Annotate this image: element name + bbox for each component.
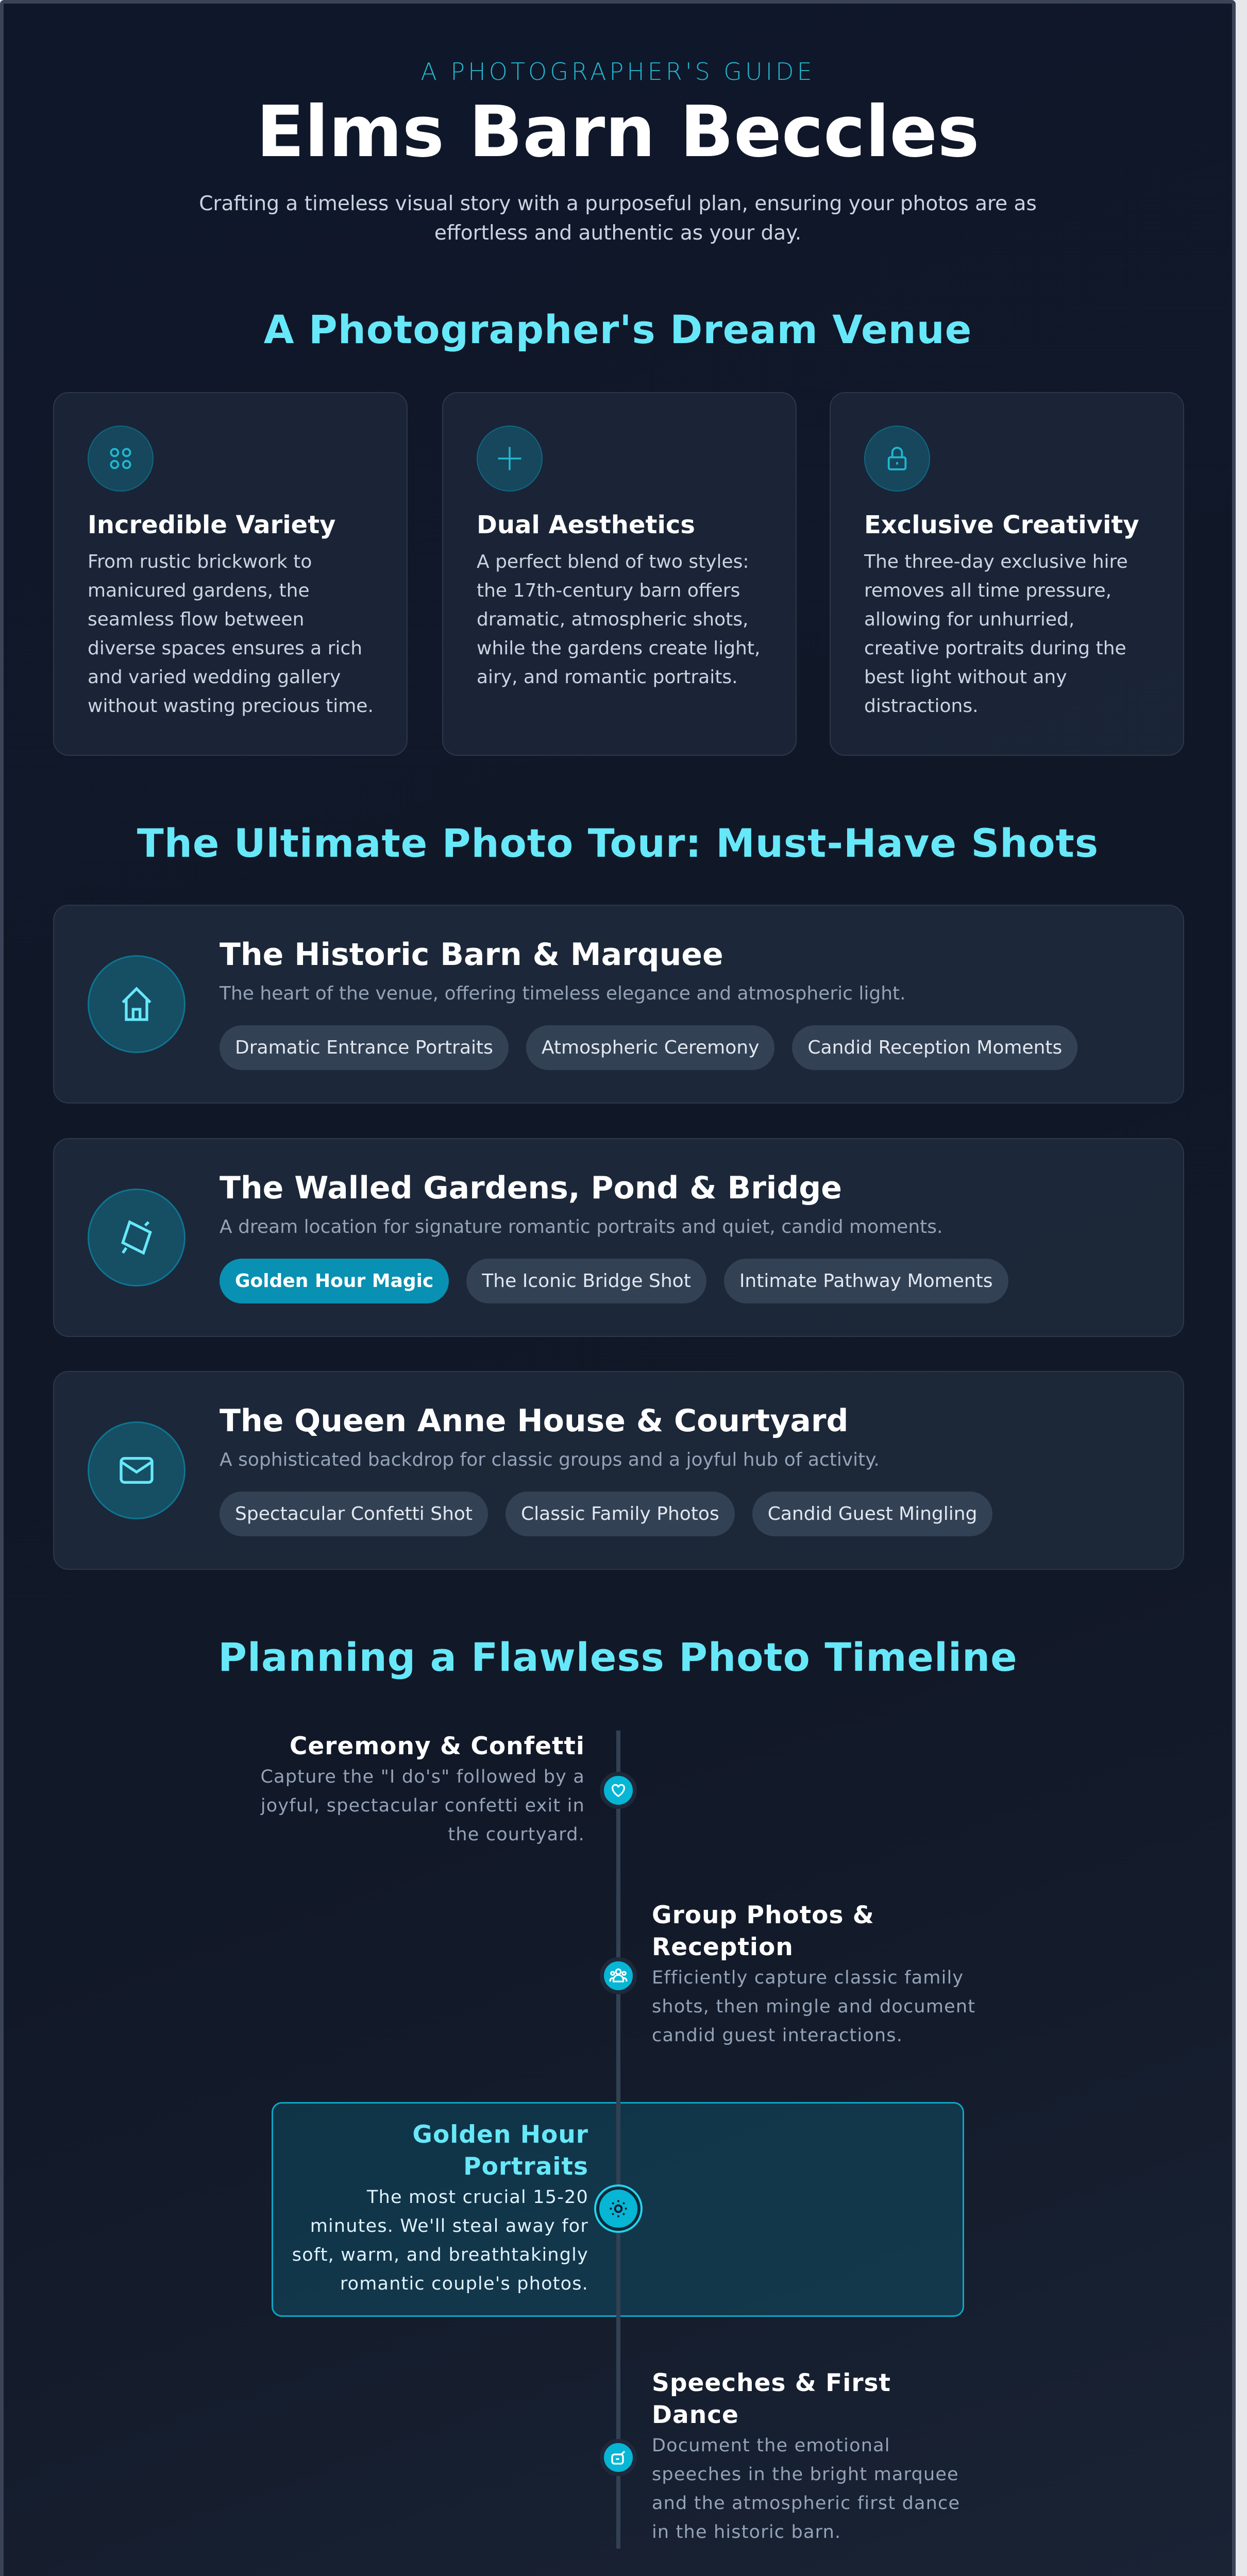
- icon: grid: [88, 426, 154, 492]
- shot tags: Dramatic Entrance Portraits: [235, 1037, 493, 1058]
- shot tags: Golden Hour Magic: [235, 1270, 433, 1292]
- step text: Capture the "I do's" followed by a joyful, spectacular confetti exit in the courtyard.: [260, 1767, 585, 1845]
- card: dual aesthetics: [442, 392, 797, 756]
- shot tags: Atmospheric Ceremony: [542, 1037, 759, 1058]
- step text: Document the emotional speeches in the bright marquee and the atmospheric first dance in the historic barn.: [652, 2435, 960, 2543]
- shot tags: Spectacular Confetti Shot: [235, 1503, 473, 1524]
- step text: The most crucial 15-20 minutes. We'll steal away for soft, warm, and breathtakingly romantic couple's photos.: [292, 2187, 588, 2294]
- highlight box: golden hour: [272, 2102, 964, 2317]
- icon: lock: [864, 426, 930, 492]
- icon: heart: [600, 1772, 637, 1809]
- location: queen anne house: [53, 1371, 1184, 1570]
- location title: The Queen Anne House & Courtyard: [220, 1403, 848, 1439]
- location description: A sophisticated backdrop for classic groups and a joyful hub of activity.: [220, 1449, 880, 1470]
- step title: Ceremony & Confetti: [290, 1732, 585, 1760]
- shot tags: Candid Guest Mingling: [768, 1503, 977, 1524]
- timeline: [260, 1731, 975, 2549]
- shot tags: [220, 1492, 992, 1536]
- card text: The three-day exclusive hire removes all time pressure, allowing for unhurried, creative portraits during the best light without any distractions.: [864, 551, 1128, 717]
- card title: Exclusive Creativity: [864, 511, 1139, 539]
- step: group photos: [652, 1901, 975, 2046]
- icon: envelope: [88, 1421, 186, 1519]
- location description: A dream location for signature romantic portraits and quiet, candid moments.: [220, 1216, 942, 1238]
- card: exclusive creativity: [830, 392, 1184, 756]
- heading: timeline: Planning a Flawless Photo Timeline: [218, 1634, 1018, 1680]
- shot tags: [220, 1025, 1077, 1070]
- icon: leaf: [88, 1189, 186, 1286]
- step text: Efficiently capture classic family shots, then mingle and document candid guest interactions.: [652, 1968, 975, 2046]
- step title: Golden Hour Portraits: [412, 2121, 588, 2181]
- card title: Incredible Variety: [88, 511, 335, 539]
- intro text: Crafting a timeless visual story with a purposeful plan, ensuring your photos are as effortless and authentic as your day.: [199, 192, 1037, 245]
- eyebrow: A PHOTOGRAPHER'S GUIDE: [420, 58, 815, 86]
- step: golden hour: [292, 2121, 588, 2294]
- step: speeches: [652, 2369, 960, 2543]
- icon: sun: [596, 2187, 641, 2231]
- shot tags: Candid Reception Moments: [807, 1037, 1062, 1058]
- icon: music: [600, 2439, 637, 2476]
- location description: The heart of the venue, offering timeless elegance and atmospheric light.: [220, 983, 906, 1004]
- card: incredible variety: [53, 392, 408, 756]
- icon: house: [88, 955, 186, 1053]
- timeline line: [616, 1731, 620, 2549]
- panel: features: [53, 392, 1184, 756]
- card text: A perfect blend of two styles: the 17th-century barn offers dramatic, atmospheric shots, while the gardens create light, airy, and romantic portraits.: [477, 551, 760, 688]
- step title: Group Photos & Reception: [652, 1901, 874, 1961]
- heading: photo tour: The Ultimate Photo Tour: Must-Have Shots: [137, 820, 1099, 866]
- heading: dream venue: A Photographer's Dream Venue: [264, 307, 972, 352]
- step: ceremony: [260, 1732, 585, 1845]
- shot tags: Classic Family Photos: [521, 1503, 719, 1524]
- step title: Speeches & First Dance: [652, 2369, 891, 2429]
- icon: group: [600, 1957, 637, 1994]
- shot tags: [220, 1259, 1008, 1303]
- icon: plus: [477, 426, 543, 492]
- location: barn: [53, 905, 1184, 1104]
- card text: From rustic brickwork to manicured gardens, the seamless flow between diverse spaces ensures a rich and varied wedding gallery without wasting precious time.: [88, 551, 374, 717]
- location title: The Historic Barn & Marquee: [220, 937, 723, 973]
- title: Elms Barn Beccles: [256, 91, 980, 173]
- location: gardens: [53, 1138, 1184, 1337]
- shot tags: The Iconic Bridge Shot: [482, 1270, 691, 1292]
- shot tags: Intimate Pathway Moments: [739, 1270, 993, 1292]
- card title: Dual Aesthetics: [477, 511, 695, 539]
- location title: The Walled Gardens, Pond & Bridge: [220, 1170, 842, 1206]
